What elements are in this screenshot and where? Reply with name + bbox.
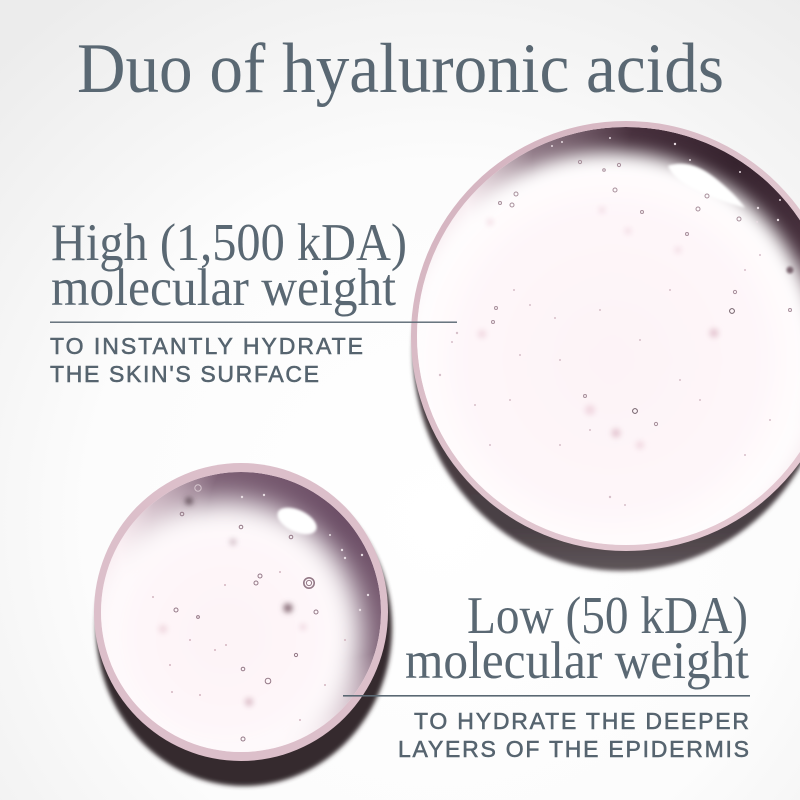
divider line low	[343, 695, 750, 697]
clear gel area small	[90, 500, 362, 772]
droplet: high molecular weight	[404, 120, 800, 571]
light bubbles in crescent small	[241, 494, 369, 611]
bubbles large	[492, 160, 792, 426]
droplet shadow large	[413, 133, 800, 571]
callout: low molecular weight: molecular weight	[405, 632, 749, 690]
description: low: TO HYDRATE THE DEEPER	[414, 708, 749, 734]
fine specks small	[152, 571, 346, 721]
droplet: low molecular weight	[90, 463, 395, 786]
pink specks large	[478, 207, 718, 449]
heading: high: High (1,500 kDA)	[51, 214, 407, 272]
description: high	[50, 333, 363, 387]
dark bubbles in crescent large	[551, 137, 781, 223]
droplet body large	[404, 120, 800, 568]
specks small	[159, 498, 306, 706]
divider line high	[50, 322, 457, 323]
dark crescent small	[129, 472, 381, 727]
bubbles small	[174, 485, 318, 741]
description: high: TO INSTANTLY HYDRATE	[50, 333, 363, 359]
droplet rim large	[411, 121, 800, 551]
fine specks large	[439, 254, 771, 506]
callout: high molecular weight	[50, 214, 457, 387]
description: low	[398, 708, 749, 762]
dark crescent large	[474, 127, 800, 311]
title: Duo of hyaluronic acids	[77, 30, 724, 108]
dark speck large	[786, 266, 794, 274]
clear gel area large	[404, 152, 800, 568]
callout: low molecular weight	[343, 587, 750, 762]
description: high: THE SKIN'S SURFACE	[50, 361, 319, 387]
droplet rim small	[94, 463, 388, 761]
droplet shadow small	[96, 470, 392, 786]
droplet body small	[101, 472, 381, 752]
highlight small	[273, 502, 321, 540]
highlight large	[668, 164, 745, 208]
heading: low: Low (50 kDA)	[467, 587, 748, 645]
description: low: LAYERS OF THE EPIDERMIS	[398, 736, 749, 762]
callout: high molecular weight: molecular weight	[51, 259, 396, 317]
